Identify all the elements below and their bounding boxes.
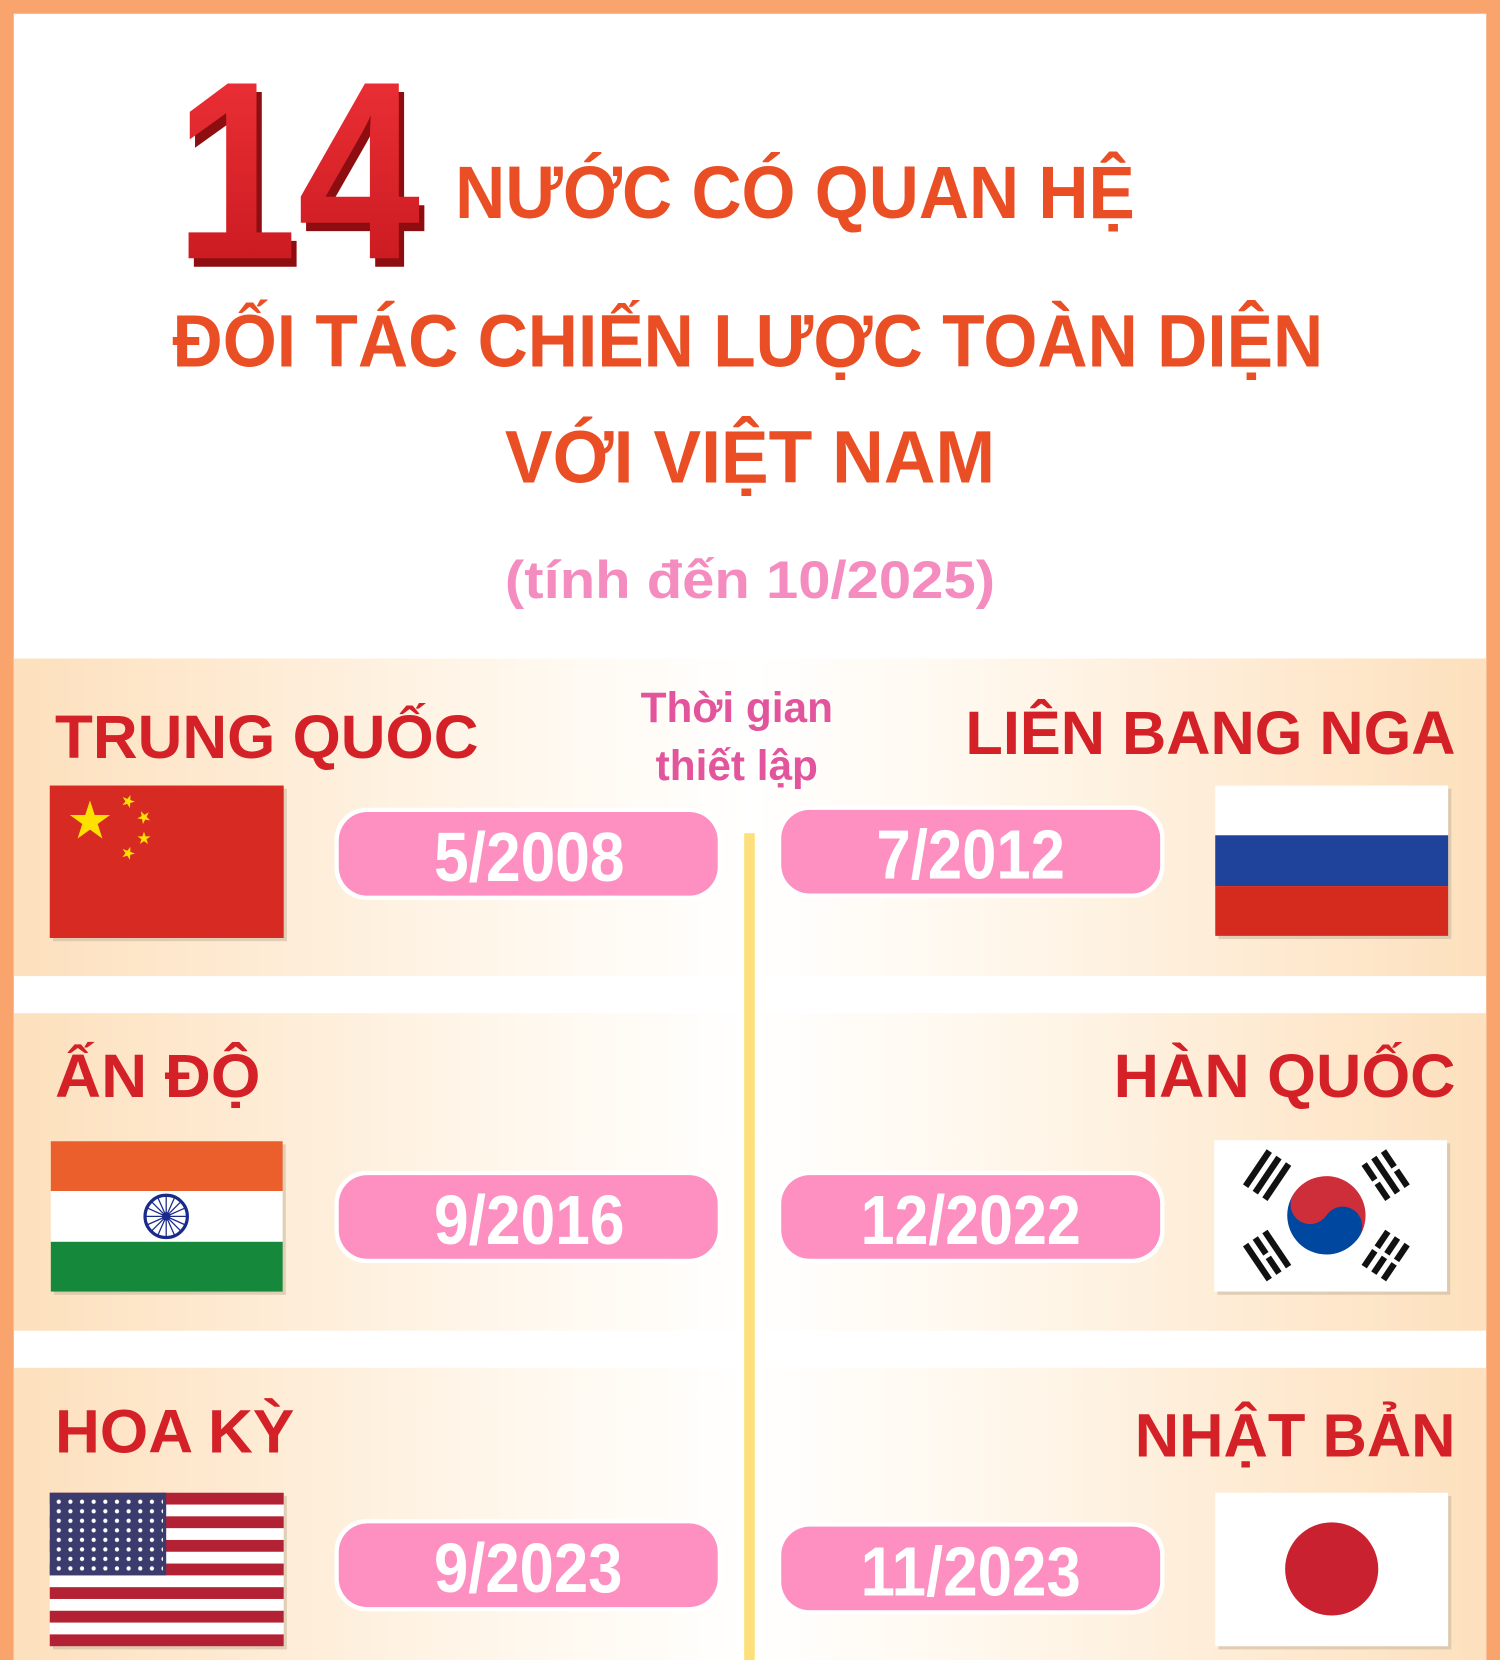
flag: Japan <box>1215 1493 1451 1649</box>
title number 14: 14 <box>175 28 420 312</box>
title number 14: 14 <box>180 37 426 321</box>
date pills: 9/2023 <box>434 1529 622 1607</box>
date pills: 12/2022 <box>861 1181 1081 1259</box>
flag: China <box>50 786 287 941</box>
date pills: 9/2016 <box>434 1181 625 1259</box>
country names: LIÊN BANG NGA <box>965 699 1456 768</box>
timeline axis <box>744 833 755 1660</box>
country names: TRUNG QUỐC <box>55 703 478 772</box>
country names: HOA KỲ <box>55 1397 294 1467</box>
date pills: 7/2012 <box>876 816 1065 894</box>
title line 1: NƯỚC CÓ QUAN HỆ <box>455 151 1135 234</box>
date pills: 5/2008 <box>434 818 625 896</box>
country names: NHẬT BẢN <box>1135 1402 1456 1471</box>
flag: Korea <box>1214 1140 1450 1295</box>
heading: thoi gian thiet lap: Thời gian <box>641 684 833 731</box>
date pills: 11/2023 <box>861 1532 1081 1610</box>
title line 2: ĐỐI TÁC CHIẾN LƯỢC TOÀN DIỆN <box>173 299 1323 382</box>
subtitle: (tính đến 10/2025) <box>505 551 995 610</box>
title line 3: VỚI VIỆT NAM <box>505 416 995 499</box>
row bands <box>14 658 1486 1660</box>
country names: ẤN ĐỘ <box>55 1042 260 1111</box>
heading: thoi gian thiet lap: thiết lập <box>656 742 818 789</box>
country names <box>55 699 1456 1471</box>
flag: India <box>51 1141 286 1295</box>
country names: HÀN QUỐC <box>1114 1042 1456 1111</box>
flag: Russia <box>1215 786 1451 939</box>
date pills <box>335 806 1164 1614</box>
heading: thoi gian thiet lap <box>641 684 833 789</box>
flag: USA <box>50 1493 287 1649</box>
